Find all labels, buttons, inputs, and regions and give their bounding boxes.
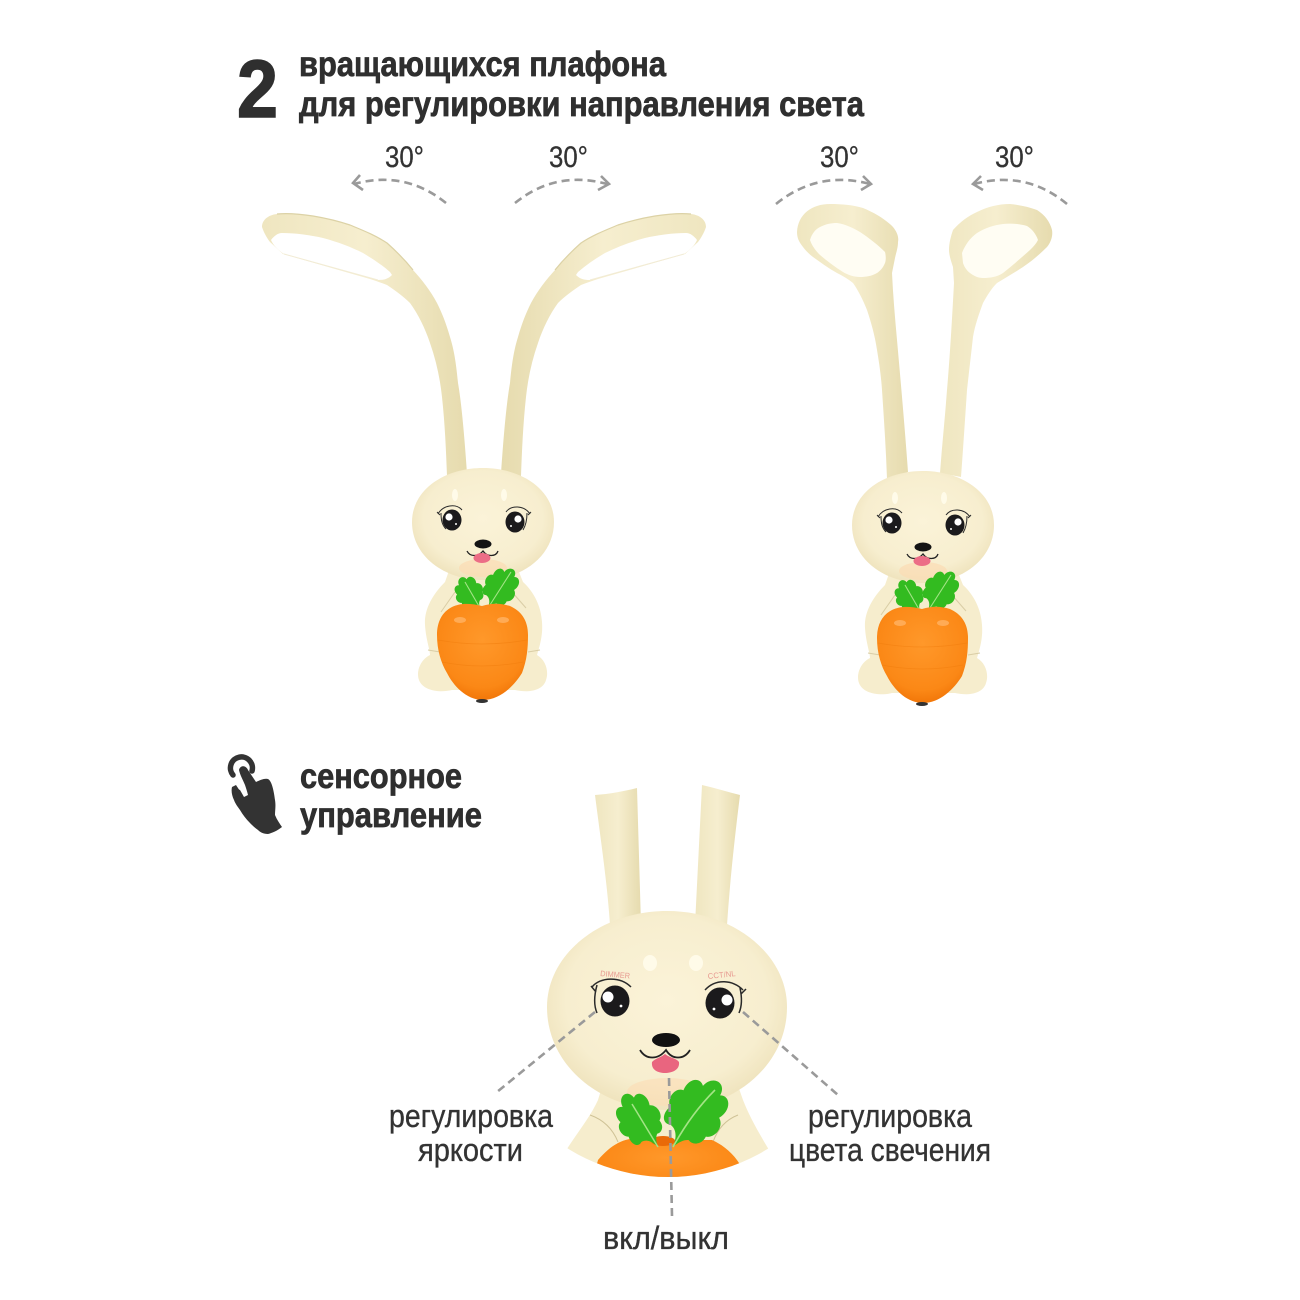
angle label left 2: 30° bbox=[549, 141, 588, 174]
right ear stub bbox=[695, 785, 740, 925]
label: glow colour bbox=[789, 1098, 991, 1168]
label: on/off: вкл/выкл bbox=[603, 1220, 729, 1256]
right eye bbox=[705, 982, 746, 1018]
rabbit body and carrot bbox=[852, 471, 994, 706]
dimmer label on head: DIMMER bbox=[600, 969, 631, 981]
heading: rotating shades bbox=[299, 45, 864, 124]
head bbox=[547, 911, 787, 1110]
label: brightness: регулировка bbox=[389, 1098, 553, 1134]
callout line: brightness bbox=[497, 1012, 595, 1092]
arrow: left shade outward bbox=[353, 175, 446, 203]
angle label left 1: 30° bbox=[385, 141, 424, 174]
left ear stub bbox=[595, 788, 641, 925]
arrow: inward right bbox=[973, 176, 1067, 204]
icon: touch finger bbox=[230, 757, 282, 834]
arrow: inward left bbox=[776, 176, 871, 204]
title number: 2 bbox=[237, 44, 278, 135]
label: brightness: яркости bbox=[418, 1132, 523, 1168]
label: glow colour: цвета свечения bbox=[789, 1132, 991, 1168]
left turned ear bbox=[797, 204, 908, 479]
heading: rotating shades: вращающихся плафона bbox=[299, 45, 666, 84]
callout line: colour bbox=[743, 1012, 838, 1095]
cct label on head: CCT/NL bbox=[707, 969, 737, 981]
right carrot leaf bbox=[648, 1064, 741, 1163]
mouth bbox=[640, 1050, 690, 1058]
left eye bbox=[591, 979, 631, 1016]
left carrot leaf bbox=[605, 1083, 675, 1160]
heading: rotating shades: для регулировки направления света bbox=[299, 85, 864, 124]
callout line: on/off bbox=[669, 1078, 672, 1216]
lamp: rabbit with ears spread bbox=[262, 214, 706, 703]
lamp: rabbit with ears turned in bbox=[797, 204, 1052, 706]
right turned ear bbox=[940, 204, 1052, 477]
label: glow colour: регулировка bbox=[808, 1098, 972, 1134]
arrow: right shade outward bbox=[515, 176, 609, 203]
right spread ear bbox=[501, 214, 706, 476]
angle label right 2: 30° bbox=[995, 141, 1034, 174]
heading: touch control: управление bbox=[300, 796, 482, 835]
heading: touch control: сенсорное bbox=[300, 757, 462, 796]
left spread ear bbox=[262, 214, 467, 476]
nose bbox=[652, 1033, 680, 1047]
rabbit body and carrot bbox=[412, 468, 554, 703]
label: brightness bbox=[389, 1098, 553, 1168]
heading: touch control bbox=[300, 757, 482, 835]
angle label right 1: 30° bbox=[820, 141, 859, 174]
body and carrot top bbox=[568, 1090, 768, 1177]
close-up: rabbit head with sensor controls bbox=[547, 785, 787, 1190]
tongue bbox=[652, 1054, 679, 1073]
